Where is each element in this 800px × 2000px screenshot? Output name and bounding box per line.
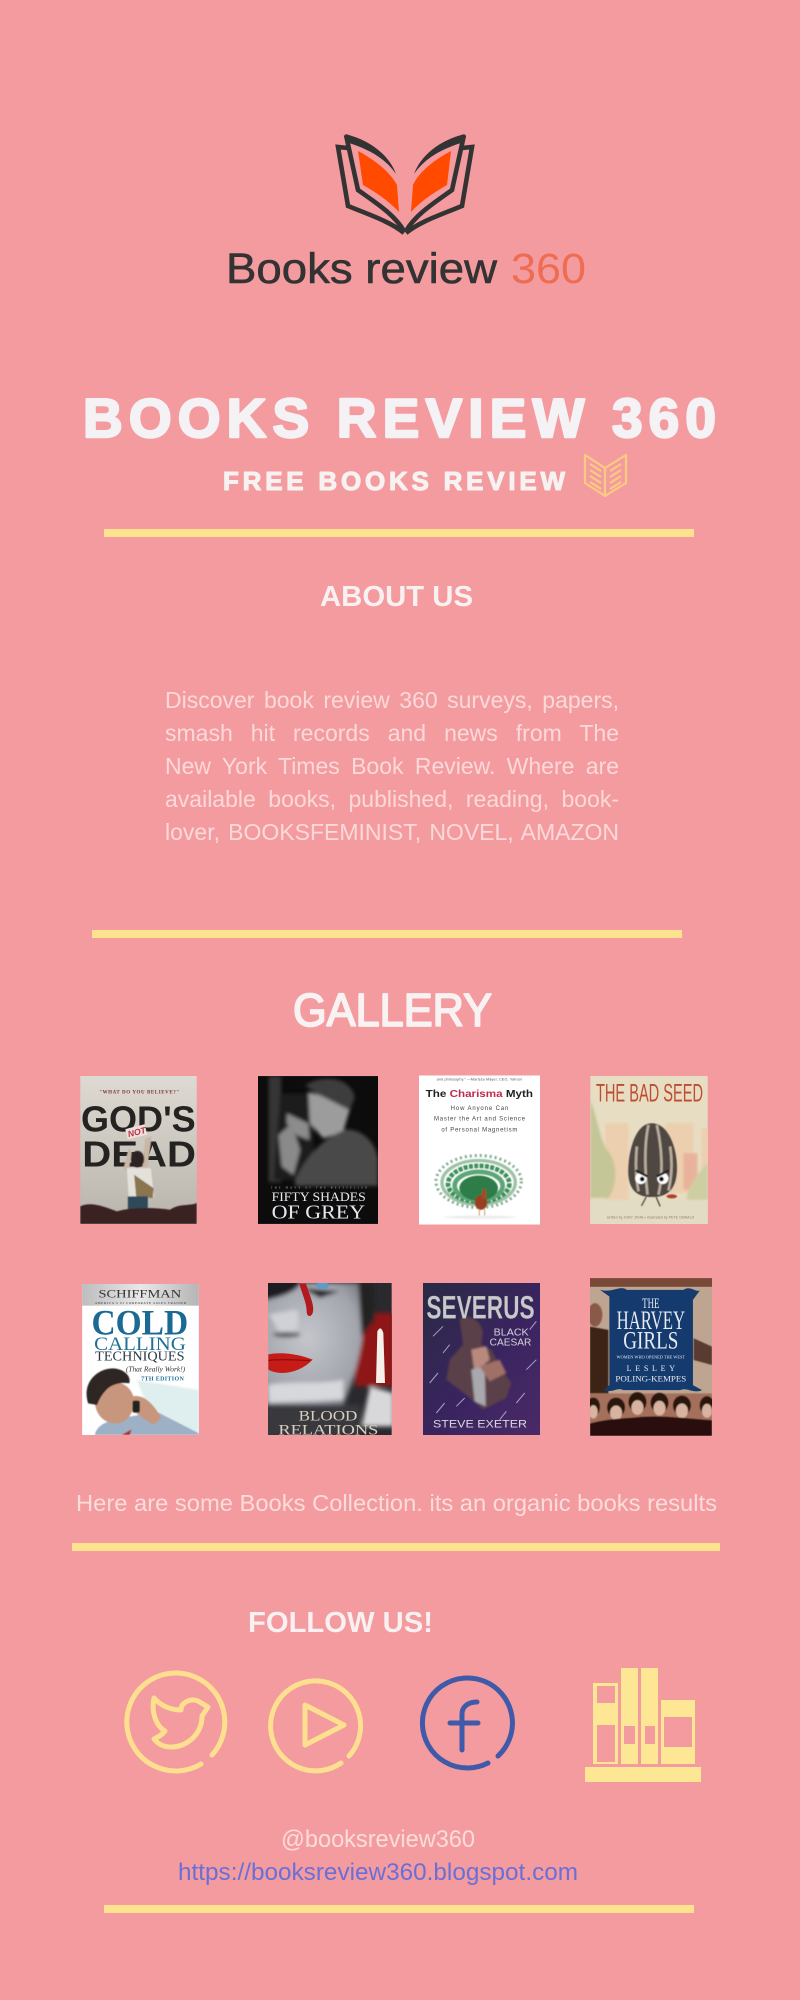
icon: open book xyxy=(338,134,472,233)
book cover: Severus the Black Caesar: STEVE EXETER xyxy=(433,1418,527,1430)
book cover: The Bad Seed: written by JORY JOHN • illustrated by PETE OSWALD xyxy=(607,1215,695,1219)
book cover: Cold Calling Techniques: TECHNIQUES xyxy=(95,1349,185,1364)
heading: gallery: GALLERY xyxy=(293,984,492,1036)
book cover: God's Not Dead: DEAD xyxy=(82,1133,196,1174)
icon: play xyxy=(271,1681,361,1771)
book cover: Cold Calling Techniques: AMERICA'S #1 CORPORATE SALES TRAINER xyxy=(95,1301,187,1305)
book cover: The Harvey Girls xyxy=(590,1278,712,1436)
heading: about us: ABOUT US xyxy=(320,581,473,613)
logo xyxy=(226,134,586,293)
icon: small book xyxy=(585,455,626,496)
about us text block: Discover book review 360 surveys, papers, xyxy=(165,687,619,713)
book cover: The Charisma Myth: Master the Art and Science xyxy=(434,1116,526,1122)
about us text block xyxy=(165,687,619,845)
book cover: The Bad Seed xyxy=(590,1076,708,1224)
icon: facebook xyxy=(422,1678,512,1768)
book cover: God's Not Dead xyxy=(80,1076,197,1224)
book cover: Cold Calling Techniques xyxy=(82,1284,199,1435)
book cover: Fifty Shades of Grey: OF GREY xyxy=(272,1202,365,1223)
book cover: The Harvey Girls: THE xyxy=(642,1296,660,1312)
divider xyxy=(104,529,694,537)
book cover: The Charisma Myth xyxy=(419,1076,540,1224)
icon: bookshelf xyxy=(585,1668,701,1782)
book cover: Blood Relations: BLOOD xyxy=(299,1409,357,1425)
website link: https://booksreview360.blogspot.com xyxy=(178,1859,578,1886)
book cover: Blood Relations xyxy=(268,1283,392,1438)
about us text block: lover, BOOKSFEMINIST, NOVEL, AMAZON xyxy=(165,819,619,845)
heading: follow us: FOLLOW US! xyxy=(248,1607,433,1639)
about us text block: New York Times Book Review. Where are xyxy=(165,753,619,779)
icon: twitter xyxy=(127,1673,225,1771)
book cover: Fifty Shades of Grey: FIFTY SHADES xyxy=(272,1190,366,1204)
about us text block: available books, published, reading, book- xyxy=(165,786,619,812)
book cover: Cold Calling Techniques: (That Really Work!) xyxy=(126,1365,186,1374)
book cover: God's Not Dead: GOD'S xyxy=(81,1099,196,1140)
book cover: Cold Calling Techniques: 7TH EDITION xyxy=(141,1376,184,1382)
book cover: God's Not Dead: "WHAT DO YOU BELIEVE?" xyxy=(99,1091,179,1096)
title: BOOKS REVIEW 360 xyxy=(83,387,716,449)
book cover: Fifty Shades of Grey: THE MOVE OF THE BESTSELLER xyxy=(271,1186,367,1189)
book cover: Blood Relations: RELATIONS xyxy=(278,1422,378,1438)
social handle: @booksreview360 xyxy=(281,1826,475,1853)
gallery caption: Here are some Books Collection. its an organic books results xyxy=(76,1490,717,1516)
book cover: Severus the Black Caesar: BLACK xyxy=(494,1328,529,1339)
book cover: Cold Calling Techniques: CALLING xyxy=(94,1334,186,1355)
book cover: Cold Calling Techniques: SCHIFFMAN xyxy=(98,1287,182,1301)
logo wordmark: Books review xyxy=(226,245,498,293)
book cover: God's Not Dead: NOT xyxy=(127,1125,148,1139)
logo number: 360 xyxy=(511,245,586,293)
divider xyxy=(72,1543,720,1551)
about us text block: smash hit records and news from The xyxy=(165,720,619,746)
book cover: The Charisma Myth: of Personal Magnetism xyxy=(441,1128,517,1134)
subtitle: FREE BOOKS REVIEW xyxy=(223,466,565,496)
book cover: The Charisma Myth: The Charisma Myth xyxy=(426,1089,533,1100)
book cover: Fifty Shades of Grey xyxy=(258,1076,378,1224)
book cover: The Harvey Girls: WOMEN WHO OPENED THE WEST xyxy=(617,1354,685,1359)
book cover: Severus the Black Caesar: CAESAR xyxy=(490,1338,531,1349)
gallery: book covers xyxy=(80,1076,714,1438)
divider xyxy=(92,930,682,938)
book cover: Severus the Black Caesar xyxy=(423,1283,540,1435)
divider xyxy=(104,1905,694,1913)
book cover: Cold Calling Techniques: COLD xyxy=(92,1302,188,1342)
book cover: The Charisma Myth: How Anyone Can xyxy=(451,1106,508,1112)
book cover: The Charisma Myth: and philosophy." —Marissa Mayer, CEO, Yahoo! xyxy=(437,1078,522,1082)
book cover: The Harvey Girls: GIRLS xyxy=(623,1326,678,1354)
book cover: The Harvey Girls: LESLEY xyxy=(627,1364,675,1373)
book cover: The Harvey Girls: POLING-KEMPES xyxy=(615,1373,686,1383)
